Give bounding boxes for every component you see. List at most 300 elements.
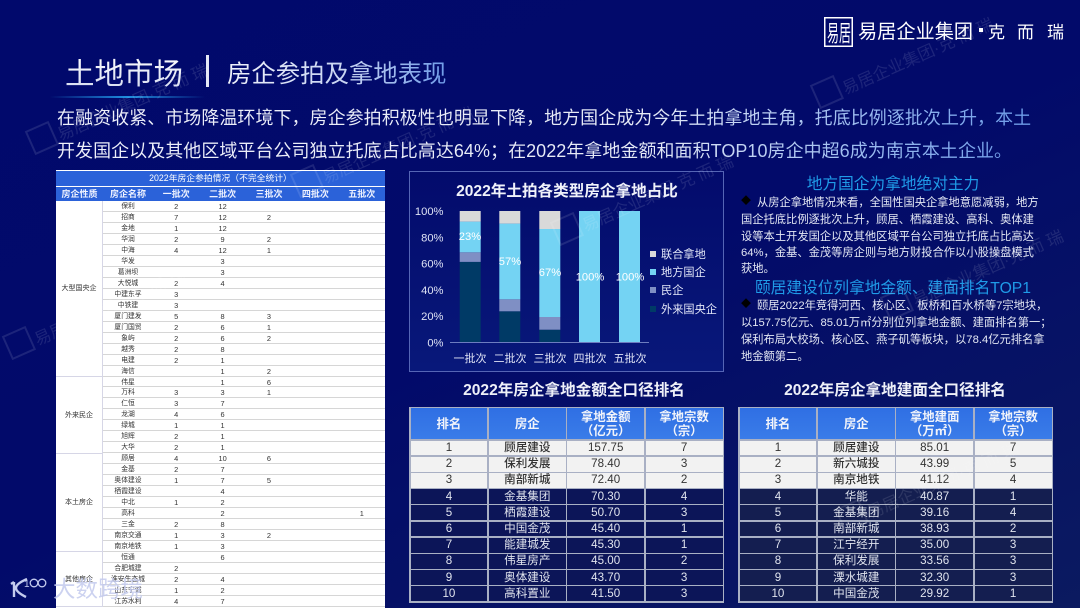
table: 拿地建面排名: 4 [1010, 506, 1016, 519]
watermark overlay: 易居企业集团·克 而 瑞 [579, 152, 736, 235]
table: 拿地建面排名: 华能 [845, 490, 868, 503]
text block: 地方国企分析 [741, 195, 1039, 274]
table: 拿地建面排名: 1 [1010, 490, 1016, 503]
table: 拿地建面排名: 1 [775, 441, 781, 454]
group: 外来民企: 外来民企 [65, 412, 93, 419]
line 1: 颐居2022年竞得河西、核心区、板桥和百水桥等7宗地块， [757, 300, 1047, 312]
table rows: 旭辉 [121, 433, 135, 440]
heading: 建面排名: 2022年房企拿地建面全口径排名 [784, 382, 1006, 399]
table rows: 5 [174, 312, 178, 321]
table rows: 7 [221, 476, 225, 485]
table rows: 6 [221, 334, 225, 343]
line 2: 以157.75亿元、85.01万㎡分别位列拿地金额、建面排名第一； [741, 317, 1052, 329]
intro paragraph line 2: 开发国企以及其他区域平台公司独立托底占比高达64%；在2022年拿地金额和面积TOP10房企中超6成为南京本土企业。 [57, 140, 1012, 160]
table: 拿地金额排名: 45.40 [591, 522, 620, 535]
table rows: 合肥城建 [114, 565, 142, 572]
table: 拿地建面排名: 南部新城 [833, 522, 880, 535]
group: 其他房企: 其他房企 [65, 576, 93, 583]
table rows: 8 [221, 520, 225, 529]
table: 拿地金额排名: 2 [681, 473, 687, 486]
table rows: 4 [174, 454, 178, 463]
table rows: 保利 [121, 203, 135, 210]
intro paragraph line 1 [57, 102, 1032, 134]
table rows: 6 [221, 553, 225, 562]
table column header [56, 187, 385, 201]
table rows: 1 [174, 586, 178, 595]
source logo mark: 1 [24, 579, 30, 590]
table column header: 三批次 [255, 189, 282, 199]
y axis labels [415, 206, 444, 349]
table rows: 7 [221, 597, 225, 606]
table rows: 1 [267, 388, 271, 397]
heading: 金额排名: 2022年房企拿地金额全口径排名 [463, 382, 685, 399]
data labels: 100% [616, 272, 644, 284]
table rows: 2 [174, 334, 178, 343]
table rows: 4 [221, 487, 225, 496]
table: 拿地金额排名: （亿元） [581, 424, 630, 438]
x axis labels: 五批次 [614, 351, 646, 365]
watermark overlay: 易居企业集团·克 而 瑞 [864, 439, 1021, 522]
table: 拿地建面排名: 43.99 [920, 457, 949, 470]
title decoration line [50, 96, 205, 98]
table rows: 大华 [121, 444, 135, 451]
table rows: 龙湖 [121, 411, 135, 418]
logo brand 而: 而 [1017, 23, 1034, 42]
table: 拿地建面排名: 7 [1010, 441, 1016, 454]
logo seal: 易 [827, 20, 839, 46]
table rows: 华润 [121, 236, 135, 243]
table rows: 6 [267, 454, 271, 463]
table: 拿地金额排名: 5 [446, 506, 452, 519]
table: 拿地建面排名: 2 [1010, 522, 1016, 535]
table rows: 葛洲坝 [118, 269, 138, 276]
table: 拿地建面排名: （宗） [994, 424, 1032, 438]
table: 拿地金额排名: 房企 [515, 417, 540, 431]
source watermark: 大数跨境 [10, 577, 143, 602]
table: 拿地金额排名: 72.40 [591, 473, 620, 486]
table rows: 4 [174, 410, 178, 419]
table rows: 2 [221, 509, 225, 518]
table: 拿地金额排名: 顾居建设 [504, 441, 550, 454]
table rows: 2 [174, 356, 178, 365]
x axis labels [454, 351, 646, 365]
table rows: 金地 [121, 225, 135, 232]
intro paragraph line 1: 在融资收紧、市场降温环境下，房企参拍积极性也明显下降，地方国企成为今年土拍拿地主角，托底比例逐批次上升，本土 [57, 108, 1031, 128]
table column header: 房企名称 [110, 189, 146, 199]
table rows: 4 [174, 597, 178, 606]
table rows: 1 [267, 246, 271, 255]
line 3: 保利布局大校场、核心区、燕子矶等板块，以78.4亿元排名拿 [741, 334, 1045, 346]
watermark overlay: 易居企业集团·克 而 瑞 [319, 104, 476, 187]
table: 拿地金额排名: 8 [446, 554, 452, 567]
logo dot [979, 28, 983, 32]
table: 拿地建面排名: 排名 [766, 417, 790, 431]
table rows: 1 [221, 356, 225, 365]
table: 拿地建面排名: 8 [775, 554, 781, 567]
table: 拿地金额排名: 中国金茂 [504, 522, 550, 535]
x axis labels: 二批次 [494, 351, 526, 365]
table rows: 12 [218, 246, 227, 255]
table rows: 电建 [121, 357, 135, 364]
table: 拿地金额排名: 41.50 [591, 587, 620, 600]
table rows: 1 [174, 531, 178, 540]
table: 拿地建面排名: 溧水城建 [833, 571, 880, 584]
watermark overlay: 易居企业集团·克 而 瑞 [839, 15, 996, 98]
table: 拿地金额排名: 拿地金额 [581, 410, 630, 424]
data labels [459, 231, 644, 284]
table rows: 2 [174, 345, 178, 354]
table rows: 12 [218, 224, 227, 233]
table: 拿地金额排名: 157.75 [588, 441, 623, 454]
table: 拿地建面排名: 39.16 [920, 506, 949, 519]
table rows: 厦门建发 [114, 313, 142, 320]
watermark overlay: 易居企业集团·克 而 瑞 [909, 227, 1066, 310]
table: 拿地金额排名: 45.30 [591, 538, 620, 551]
table rows: 栖霞建设 [114, 488, 142, 495]
legend: 联合拿地 [661, 247, 706, 261]
table: 拿地金额排名: 7 [681, 441, 687, 454]
table: 拿地金额排名: 10 [442, 587, 455, 600]
table: 拿地金额排名: 南部新城 [504, 473, 550, 486]
table: 拿地金额排名: 3 [681, 506, 687, 519]
legend: 民企 [661, 283, 683, 297]
x axis labels: 三批次 [534, 351, 566, 365]
group: 大型国央企: 大型国央企 [62, 285, 96, 292]
table rows: 越秀 [121, 346, 135, 353]
line 4: 地金额第二。 [741, 351, 809, 363]
table: 拿地金额排名: （宗） [665, 424, 703, 438]
bar: 二批次 [499, 211, 520, 342]
logo wordmark: 易居企业集团 [858, 22, 973, 43]
table rows: 三金 [121, 521, 135, 528]
table: 拿地建面排名: 9 [775, 571, 781, 584]
table rows: 1 [174, 542, 178, 551]
table rows: 2 [267, 235, 271, 244]
logo brand 克: 克 [988, 23, 1005, 42]
table: 拿地建面排名: 40.87 [920, 490, 949, 503]
group: 本土房企: 本土房企 [65, 499, 93, 506]
table: 拿地金额排名: 能建城发 [504, 538, 550, 551]
table rows: 1 [174, 224, 178, 233]
table: 拿地金额排名: 4 [681, 490, 687, 503]
table: 拿地建面排名: 41.12 [920, 473, 949, 486]
table: 拿地金额排名: 7 [446, 538, 452, 551]
title separator bar [206, 55, 209, 87]
table rows: 7 [221, 399, 225, 408]
table: 拿地建面排名: 4 [1010, 473, 1016, 486]
table rows: 2 [174, 520, 178, 529]
table: 拿地建面排名: 4 [775, 490, 781, 503]
table rows: 大悦城 [118, 280, 138, 287]
table rows: 3 [174, 388, 178, 397]
bar: 四批次 [579, 211, 600, 342]
x axis labels: 一批次 [454, 351, 486, 365]
legend: 地方国企 [661, 265, 706, 279]
table rows [103, 202, 385, 607]
table rows: 10 [218, 454, 227, 463]
table rows: 中海 [121, 247, 135, 254]
table: 拿地金额排名: 3 [446, 473, 452, 486]
table rows: 3 [221, 531, 225, 540]
table rows: 1 [174, 421, 178, 430]
table rows: 7 [174, 213, 178, 222]
table rows: 2 [174, 575, 178, 584]
table: 拿地建面排名: 5 [1010, 457, 1016, 470]
table rows: 4 [221, 279, 225, 288]
y axis labels: 60% [421, 259, 444, 271]
diamond bullet: ◆ [741, 299, 751, 310]
table rows: 2 [267, 531, 271, 540]
group: 本土房企 [56, 454, 103, 552]
table: 拿地建面排名: 5 [775, 506, 781, 519]
table: 拿地建面排名: 保利发展 [833, 554, 880, 567]
table: 拿地建面排名: 33.56 [920, 554, 949, 567]
table: 拿地建面排名: 2 [775, 457, 781, 470]
table rows: 中建东孚 [114, 291, 142, 298]
watermark overlay: 易居企业集团·克 而 瑞 [54, 61, 211, 144]
table rows: 1 [221, 367, 225, 376]
table rows: 6 [267, 378, 271, 386]
line 5: 获地。 [741, 262, 775, 274]
legend [650, 247, 717, 316]
legend: 外来国央企 [661, 302, 717, 316]
table: 拿地金额排名: 70.30 [591, 490, 620, 503]
table rows: 9 [221, 235, 225, 244]
table rows: 2 [221, 586, 225, 595]
intro paragraph line 2 [57, 134, 1032, 168]
table: 拿地建面排名: 7 [775, 538, 781, 551]
table rows: 山东宁诚 [114, 587, 142, 594]
table: 拿地金额排名: 金基集团 [504, 490, 550, 503]
table rows: 2 [174, 202, 178, 211]
table rows: 厦门国贸 [114, 324, 142, 331]
table rows: 奥体建设 [114, 477, 142, 484]
table rows: 2 [221, 498, 225, 507]
table rows: 3 [174, 290, 178, 299]
table rows: 万科 [121, 389, 135, 396]
table rows: 南京交通 [114, 532, 142, 539]
data labels: 67% [539, 267, 561, 279]
table: 拿地金额排名: 1 [446, 441, 452, 454]
table rows: 12 [218, 202, 227, 211]
table rows: 华发 [121, 258, 135, 265]
subtitle: 房企参拍及拿地表现 [227, 61, 447, 88]
table: 拿地建面排名: 1 [1010, 587, 1016, 600]
table rows: 1 [174, 498, 178, 507]
table column header: 二批次 [209, 189, 236, 199]
logo brand 瑞: 瑞 [1047, 23, 1064, 42]
bar: 一批次 [460, 211, 481, 342]
table: 拿地金额排名: 3 [681, 587, 687, 600]
y axis labels: 20% [421, 311, 444, 323]
table: 拿地金额排名: 2 [446, 457, 452, 470]
line 3: 设等本土开发国企以及其他区域平台公司独立托底占比高达 [741, 230, 1034, 242]
source logo mark [10, 578, 46, 598]
table: 拿地金额排名: 45.00 [591, 554, 620, 567]
table rows: 4 [174, 246, 178, 255]
table: 拿地金额排名: 奥体建设 [504, 571, 550, 584]
table: 拿地金额排名: 43.70 [591, 571, 620, 584]
table rows: 12 [218, 213, 227, 222]
bar: 三批次 [539, 211, 560, 342]
table rows: 3 [221, 257, 225, 266]
table: 拿地金额排名: 3 [681, 457, 687, 470]
table: 拿地建面排名: 南京地铁 [833, 473, 880, 486]
table rows: 海信 [121, 368, 135, 375]
panel: stacked bar chart [409, 171, 724, 372]
table rows: 1 [221, 432, 225, 441]
table rows: 2 [174, 465, 178, 474]
table: 拿地建面排名: 3 [1010, 571, 1016, 584]
table rows: 2 [174, 235, 178, 244]
table rows: 2 [267, 213, 271, 222]
group: 其他房企 [56, 552, 103, 607]
table title [56, 171, 385, 186]
table rows: 3 [221, 542, 225, 551]
panel: 2022年房企参拍情况 table [56, 170, 385, 608]
table rows: 1 [174, 476, 178, 485]
table rows: 招商 [121, 214, 135, 221]
watermark overlay: 易居企业集团·克 而 瑞 [31, 266, 188, 349]
logo seal: 居 [839, 20, 851, 46]
table: 拿地金额排名: 1 [681, 522, 687, 535]
table: 拿地建面排名: 35.00 [920, 538, 949, 551]
table rows: 江苏水利 [114, 598, 142, 605]
table: 拿地金额排名: 6 [446, 522, 452, 535]
table rows: 3 [174, 399, 178, 408]
table: 拿地建面排名: 金基集团 [833, 506, 880, 519]
table rows: 象屿 [121, 335, 135, 342]
table rows: 6 [221, 410, 225, 419]
table: 拿地建面排名: 江宁经开 [833, 538, 880, 551]
table rows: 7 [221, 465, 225, 474]
table: 拿地建面排名: 38.93 [920, 522, 949, 535]
table rows: 1 [360, 509, 364, 518]
table: 拿地建面排名: 顾居建设 [833, 441, 880, 454]
table: 拿地建面排名: 新六城投 [833, 457, 880, 470]
table: 拿地金额排名: 2 [681, 554, 687, 567]
chart background [410, 172, 724, 372]
heading: 地方国企为拿地绝对主力: 地方国企为拿地绝对主力 [807, 176, 979, 193]
table rows: 3 [267, 312, 271, 321]
table rows: 2 [174, 323, 178, 332]
data labels: 23% [459, 231, 481, 243]
table: 拿地建面排名: 3 [1010, 538, 1016, 551]
table rows: 恒通 [121, 554, 135, 561]
table rows: 6 [221, 323, 225, 332]
table: 拿地金额排名: 栖霞建设 [504, 506, 550, 519]
table rows: 5 [267, 476, 271, 485]
diamond bullet: ◆ [741, 196, 751, 207]
table: 拿地金额排名: 78.40 [591, 457, 620, 470]
data labels: 57% [499, 256, 521, 268]
table: 拿地建面排名: 85.01 [920, 441, 949, 454]
table: 拿地金额排名: 高科置业 [504, 587, 550, 600]
table rows: 2 [267, 334, 271, 343]
table rows: 高科 [121, 510, 135, 517]
table column header: 房企性质 [61, 189, 98, 199]
table rows: 4 [221, 575, 225, 584]
table: 拿地建面排名: 拿地宗数 [988, 410, 1038, 424]
table rows: 仁恒 [121, 400, 135, 407]
y axis labels: 0% [427, 337, 444, 349]
x axis line [450, 342, 649, 344]
table: 拿地建面排名: 29.92 [920, 587, 949, 600]
table: 拿地建面排名: 拿地建面 [910, 410, 959, 424]
table rows: 1 [221, 421, 225, 430]
table rows: 中北 [121, 499, 135, 506]
table: 拿地建面排名 [738, 407, 1053, 603]
y axis labels: 80% [421, 232, 444, 244]
line 1: 从房企拿地情况来看，全国性国央企拿地意愿减弱，地方 [757, 197, 1039, 209]
table rows: 南京地铁 [114, 543, 142, 550]
table rows: 2 [174, 432, 178, 441]
table title: 2022年房企参拍情况（不完全统计） [149, 173, 292, 183]
table rows: 2 [267, 367, 271, 376]
line 2: 国企托底比例逐批次上升，顾居、栖霞建设、高科、奥体建 [741, 214, 1034, 226]
table: 拿地金额排名: 9 [446, 571, 452, 584]
table rows: 1 [221, 378, 225, 386]
table: 拿地金额排名: 拿地宗数 [659, 410, 709, 424]
table: 拿地建面排名: 中国金茂 [833, 587, 880, 600]
table: 拿地建面排名: （万㎡） [910, 424, 959, 438]
x axis labels: 四批次 [574, 351, 606, 365]
table rows: 顾居 [121, 455, 135, 462]
table rows: 1 [267, 323, 271, 332]
y axis labels: 40% [421, 285, 444, 297]
group: 外来民企 [56, 377, 103, 454]
table: 拿地金额排名: 保利发展 [504, 457, 550, 470]
table rows: 8 [221, 312, 225, 321]
table column header: 五批次 [348, 189, 375, 199]
table rows: 2 [174, 443, 178, 452]
logo seal [824, 17, 853, 47]
logo: 易居企业集团·克而瑞 [824, 17, 1064, 47]
table rows: 绿城 [121, 422, 135, 429]
line 4: 64%，金基、金茂等房企则与地方财投合作以小股操盘模式 [741, 247, 1034, 259]
bar: 五批次 [619, 211, 640, 342]
table rows: 中铁建 [118, 302, 138, 309]
table column header: 一批次 [163, 189, 190, 199]
table: 拿地金额排名: 伟星房产 [504, 554, 550, 567]
table: 拿地金额排名: 3 [681, 571, 687, 584]
table rows: 3 [174, 301, 178, 310]
y axis labels: 100% [415, 206, 444, 218]
table rows: 2 [174, 279, 178, 288]
title: 土地市场 [65, 58, 183, 91]
table: 拿地建面排名: 3 [1010, 554, 1016, 567]
heading: 颐居建设位列拿地金额、建面排名TOP1: 颐居建设位列拿地金额、建面排名TOP1 [755, 280, 1031, 297]
table rows: 金基 [121, 466, 135, 473]
table rows: 3 [221, 388, 225, 397]
data labels: 100% [576, 272, 604, 284]
table: 拿地金额排名: 4 [446, 490, 452, 503]
table: 拿地建面排名: 房企 [844, 417, 869, 431]
table: 拿地建面排名: 10 [771, 587, 784, 600]
table rows: 2 [174, 564, 178, 573]
table: 拿地金额排名: 1 [681, 538, 687, 551]
table rows: 1 [221, 443, 225, 452]
text block: 颐居建设分析 [741, 298, 1052, 363]
table: 拿地建面排名: 32.30 [920, 571, 949, 584]
table: 拿地建面排名: 6 [775, 522, 781, 535]
source name: 大数跨境 [53, 577, 143, 602]
table: 拿地金额排名: 排名 [437, 417, 461, 431]
table: 拿地金额排名: 50.70 [591, 506, 620, 519]
table: 拿地建面排名: 3 [775, 473, 781, 486]
table rows: 8 [221, 345, 225, 354]
table column header: 四批次 [302, 189, 329, 199]
